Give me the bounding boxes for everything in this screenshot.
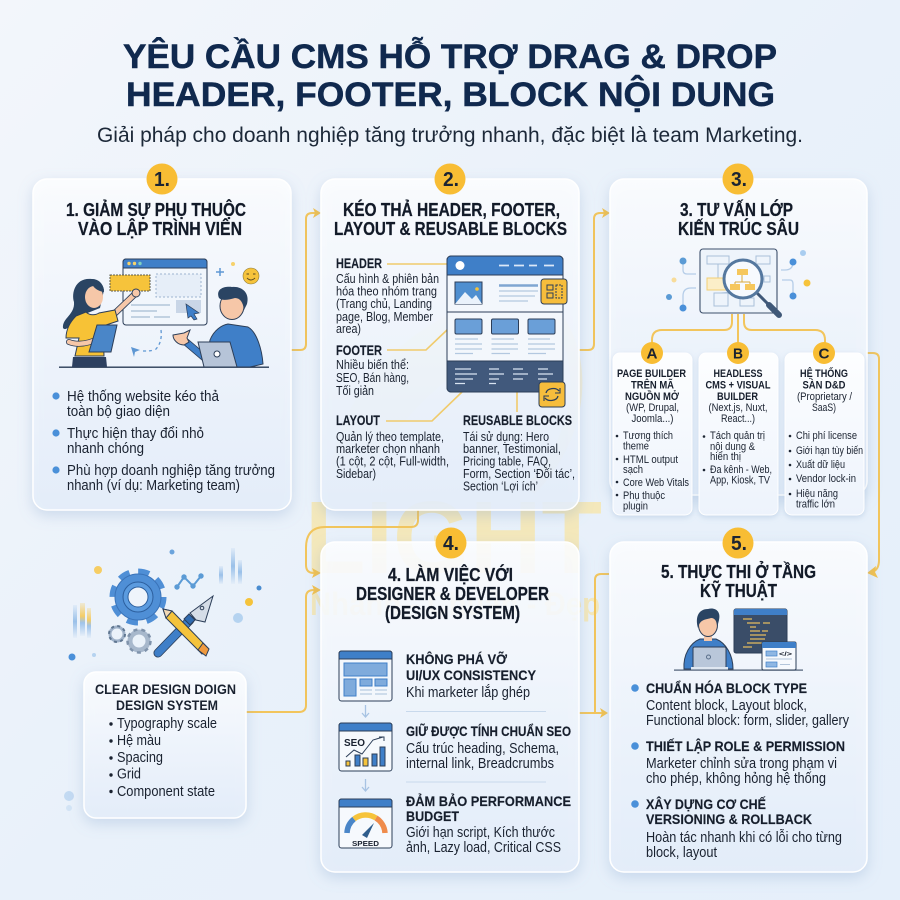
badge 5: 5. bbox=[731, 533, 747, 555]
label: layout: (1 cột, 2 cột, Full-width, bbox=[336, 454, 449, 468]
panel: option B: nội dung & bbox=[710, 441, 755, 453]
icon: sync bbox=[539, 382, 565, 407]
panel: option B: App, Kiosk, TV bbox=[710, 474, 770, 486]
label: reusable blocks: banner, Testimonial, bbox=[463, 441, 561, 456]
panel: option C: Hiệu năng bbox=[796, 488, 838, 500]
panel: option B: HEADLESS bbox=[714, 368, 763, 380]
icon: seo window bbox=[339, 723, 392, 771]
heading 4: (DESIGN SYSTEM) bbox=[385, 603, 520, 623]
item: performance budget: BUDGET bbox=[406, 809, 460, 824]
panel: option A bbox=[613, 342, 692, 515]
heading 3 bbox=[678, 199, 799, 239]
label: reusable blocks: REUSABLE BLOCKS bbox=[463, 413, 572, 428]
panel: option B: CMS + VISUAL bbox=[706, 380, 771, 392]
panel: card 2 bbox=[321, 164, 579, 510]
label: footer: FOOTER bbox=[336, 343, 382, 358]
woman bbox=[63, 279, 104, 329]
label: layout: Quản lý theo template, bbox=[336, 429, 444, 444]
label: footer: Tối giản bbox=[336, 383, 374, 398]
bullet list 1: Thực hiện thay đổi nhỏ bbox=[67, 426, 204, 442]
panel: option C: Giới hạn tùy biến bbox=[796, 445, 863, 457]
bullet list 1: Hệ thống website kéo thả bbox=[67, 389, 220, 405]
website mockup bbox=[447, 256, 567, 407]
panel: card 5 bbox=[610, 528, 867, 872]
arrow down bbox=[362, 779, 369, 791]
item: seo: GIỮ ĐƯỢC TÍNH CHUẨN SEO bbox=[406, 724, 571, 739]
panel: option B: hiển thị bbox=[710, 451, 741, 463]
panel: option C: Chi phí license bbox=[796, 430, 857, 442]
item: versioning rollback: Hoàn tác nhanh khi có lỗi cho từng bbox=[646, 829, 842, 846]
heading 5: KỸ THUẬT bbox=[700, 580, 777, 601]
badge 4 bbox=[436, 528, 466, 558]
panel: option A: NGUỒN MỞ bbox=[625, 390, 679, 403]
heading 3: 3. TƯ VẤN LỚP bbox=[680, 199, 793, 220]
panel: option C: SÀN D&D bbox=[802, 378, 846, 392]
heading 4: DESIGNER & DEVELOPER bbox=[356, 584, 549, 604]
panel: option A: plugin bbox=[623, 500, 648, 512]
label: reusable blocks: Form, Section ‘Đối tác’, bbox=[463, 466, 575, 481]
panel: option C: Xuất dữ liệu bbox=[796, 459, 845, 471]
panel: option B: Đa kênh - Web, bbox=[710, 464, 772, 476]
panel: option C: HỆ THỐNG bbox=[800, 366, 848, 380]
panel: design system: Grid bbox=[117, 766, 141, 782]
arrow: card 1 to card 2 bbox=[291, 208, 321, 350]
panel: option C: (Proprietary / bbox=[797, 391, 853, 403]
item: role permission: Marketer chỉnh sửa trong phạm vi bbox=[646, 756, 837, 772]
illustration: gears and design tools bbox=[64, 548, 262, 811]
item: versioning rollback: block, layout bbox=[646, 845, 717, 861]
icon: speed gauge bbox=[339, 799, 392, 848]
label: header: HEADER bbox=[336, 256, 382, 271]
item: block type: CHUẨN HÓA BLOCK TYPE bbox=[646, 681, 807, 696]
heading 1: 1. GIẢM SỰ PHỤ THUỘC bbox=[66, 199, 246, 220]
heading 4: 4. LÀM VIỆC VỚI bbox=[388, 564, 513, 585]
panel: option A: TRÊN MÃ bbox=[631, 378, 674, 392]
label: reusable blocks: Section ‘Lợi ích’ bbox=[463, 478, 538, 494]
panel: option A: HTML output bbox=[623, 454, 679, 466]
item: role permission bbox=[631, 739, 845, 787]
bullet list 1: toàn bộ giao diện bbox=[67, 404, 170, 420]
panel: option A: sạch bbox=[623, 464, 643, 476]
heading 2 bbox=[334, 199, 567, 239]
panel: option C bbox=[785, 342, 864, 515]
icon: layout block bbox=[541, 279, 567, 304]
arrow: card 2 to card 3 bbox=[579, 208, 610, 350]
item: performance budget: ảnh, Lazy load, Critical CSS bbox=[406, 840, 561, 856]
item: role permission: cho phép, không hỏng hệ thống bbox=[646, 771, 826, 787]
item: seo: internal link, Breadcrumbs bbox=[406, 756, 554, 772]
badge A bbox=[641, 342, 663, 364]
icon: speed gauge: SPEED bbox=[352, 839, 380, 848]
item: ui/ux consistency: UI/UX CONSISTENCY bbox=[406, 668, 536, 683]
label: header: hóa theo nhóm trang bbox=[336, 284, 437, 298]
connectors bbox=[386, 264, 517, 421]
panel: option B: (Next.js, Nuxt, bbox=[708, 402, 768, 414]
panel: option C: traffic lớn bbox=[796, 498, 835, 510]
heading 5 bbox=[661, 561, 816, 601]
illustration: developer at laptop bbox=[674, 609, 803, 671]
item: role permission: THIẾT LẬP ROLE & PERMISSION bbox=[646, 739, 845, 754]
item: ui/ux consistency: KHÔNG PHÁ VỠ bbox=[406, 652, 507, 667]
heading 1 bbox=[66, 199, 246, 239]
label: header bbox=[336, 256, 439, 336]
item: block type: Content block, Layout block, bbox=[646, 698, 807, 714]
illustration: developer at laptop: </> bbox=[779, 651, 792, 658]
panel: option C: SaaS) bbox=[812, 402, 836, 414]
item: block type bbox=[631, 681, 850, 729]
arrow: card 2 to card 4 bbox=[306, 510, 418, 578]
label: layout: marketer chọn nhanh bbox=[336, 441, 440, 456]
heading 5: 5. THỰC THI Ở TẦNG bbox=[661, 561, 816, 582]
panel: option B: BUILDER bbox=[717, 391, 758, 403]
panel: card 4 bbox=[321, 528, 579, 872]
label: header: area) bbox=[336, 321, 361, 336]
panel: design system: CLEAR DESIGN DOIGN bbox=[95, 681, 236, 697]
label: layout: LAYOUT bbox=[336, 413, 381, 428]
badge 3 bbox=[722, 164, 754, 194]
panel: card 1 bbox=[33, 164, 291, 510]
panel: design system bbox=[84, 672, 246, 818]
item: ui/ux consistency: Khi marketer lắp ghép bbox=[406, 684, 530, 701]
item: performance budget: ĐẢM BẢO PERFORMANCE bbox=[406, 794, 571, 809]
item: seo: Cấu trúc heading, Schema, bbox=[406, 741, 559, 757]
arrow: design system to card 4 bbox=[246, 585, 321, 712]
title bbox=[123, 38, 777, 114]
label: header: Cấu hình & phiên bản bbox=[336, 271, 439, 286]
label: layout: Sidebar) bbox=[336, 466, 376, 481]
bullet list 1 bbox=[52, 389, 275, 494]
item: versioning rollback: XÂY DỰNG CƠ CHẾ bbox=[646, 797, 766, 812]
heading 3: KIẾN TRÚC SÂU bbox=[678, 218, 799, 239]
watermark: LIGHT logo bbox=[305, 297, 602, 622]
badge 4: 4. bbox=[443, 533, 459, 555]
panel: design system: Spacing bbox=[117, 750, 163, 766]
badge 5 bbox=[722, 528, 754, 558]
label: reusable blocks bbox=[463, 413, 575, 494]
heading 1: VÀO LẬP TRÌNH VIÊN bbox=[78, 218, 242, 239]
icon: layout window bbox=[339, 651, 392, 701]
arrow down bbox=[362, 705, 369, 717]
heading 2: KÉO THẢ HEADER, FOOTER, bbox=[343, 199, 560, 220]
badge A: A bbox=[646, 346, 658, 362]
badge C bbox=[813, 342, 835, 364]
item: versioning rollback: VERSIONING & ROLLBACK bbox=[646, 812, 812, 827]
label: reusable blocks: Pricing table, FAQ, bbox=[463, 454, 551, 468]
panel: option A: theme bbox=[623, 440, 649, 452]
panel: card 3 bbox=[610, 164, 867, 515]
label: footer: SEO, Bán hàng, bbox=[336, 370, 409, 385]
panel: option A: Core Web Vitals bbox=[623, 477, 689, 489]
bullet list 1: nhanh chóng bbox=[67, 441, 144, 457]
icon: seo window: SEO bbox=[344, 737, 365, 749]
panel: design system: Hệ màu bbox=[117, 733, 161, 749]
panel: option B bbox=[699, 342, 778, 515]
panel: design system: DESIGN SYSTEM bbox=[116, 697, 218, 713]
badge B: B bbox=[733, 346, 743, 362]
item: ui/ux consistency bbox=[406, 652, 536, 701]
bullet list 1: nhanh (ví dụ: Marketing team) bbox=[67, 478, 240, 494]
panel: design system: Typography scale bbox=[117, 716, 217, 732]
watermark: LIGHT logo: LIGHT bbox=[305, 480, 602, 595]
panel: option B: React...) bbox=[721, 413, 755, 425]
icon: architecture magnifier bbox=[666, 249, 810, 315]
item: performance budget bbox=[406, 794, 571, 856]
label: reusable blocks: Tái sử dụng: Hero bbox=[463, 429, 549, 444]
subtitle: Giải pháp cho doanh nghiệp tăng trưởng nhanh, đặc biệt là team Marketing. bbox=[97, 123, 803, 147]
item: performance budget: Giới hạn script, Kích thước bbox=[406, 825, 555, 841]
badge B bbox=[727, 342, 749, 364]
badge 1 bbox=[146, 164, 178, 194]
label: header: (Trang chủ, Landing bbox=[336, 296, 432, 311]
item: versioning rollback bbox=[631, 797, 842, 861]
label: footer bbox=[336, 343, 409, 398]
title: HEADER, FOOTER, BLOCK NỘI DUNG bbox=[126, 75, 775, 114]
label: footer: Nhiều biến thể: bbox=[336, 357, 409, 372]
badge 2: 2. bbox=[443, 169, 459, 191]
panel: option B: Tách quản trị bbox=[710, 430, 765, 442]
panel: option A: PAGE BUILDER bbox=[617, 368, 686, 380]
badge 2 bbox=[434, 164, 466, 194]
label: layout bbox=[336, 413, 449, 481]
arrow: card 4 to card 5 bbox=[579, 574, 609, 718]
watermark: LIGHT logo: Nhanh - Chuẩn - Đẹp bbox=[310, 586, 600, 622]
illustration: team editing website bbox=[59, 259, 269, 368]
badge 1: 1. bbox=[154, 169, 170, 191]
panel: option A: (WP, Drupal, bbox=[626, 402, 679, 414]
connectors to A B C bbox=[652, 314, 825, 345]
panel: design system: Component state bbox=[117, 784, 215, 800]
item: seo bbox=[406, 724, 571, 772]
panel: option A: Tương thích bbox=[623, 430, 673, 442]
bullet list 1: Phù hợp doanh nghiệp tăng trưởng bbox=[67, 463, 275, 479]
man bbox=[205, 324, 263, 367]
heading 2: LAYOUT & REUSABLE BLOCKS bbox=[334, 219, 567, 239]
panel: option A: Phụ thuộc bbox=[623, 490, 665, 502]
arrow: card 3 to card 5 bbox=[866, 353, 879, 578]
badge 3: 3. bbox=[731, 169, 747, 191]
panel: option C: Vendor lock-in bbox=[796, 473, 856, 485]
panel: option A: Joomla...) bbox=[632, 413, 674, 425]
title: YÊU CẦU CMS HỖ TRỢ DRAG & DROP bbox=[123, 38, 777, 76]
badge C: C bbox=[818, 346, 830, 362]
heading 4 bbox=[356, 564, 549, 623]
item: block type: Functional block: form, slider, gallery bbox=[646, 713, 850, 729]
label: header: page, Blog, Member bbox=[336, 309, 434, 324]
